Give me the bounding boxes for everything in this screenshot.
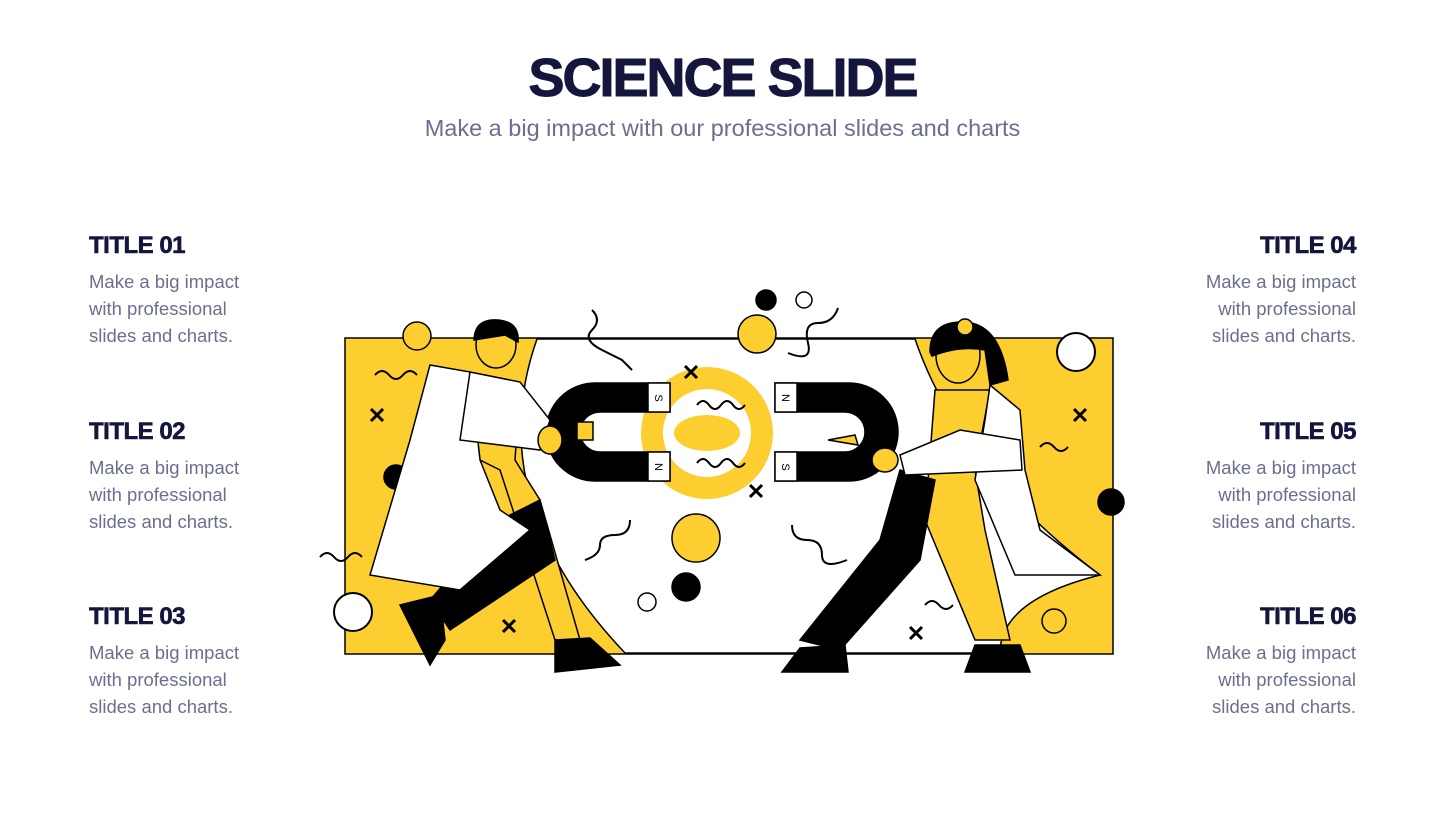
subtitle: Make a big impact with our professional slides and charts <box>425 115 1020 141</box>
text block: title 04 <box>1206 232 1357 346</box>
text block: title 06 <box>1206 603 1356 717</box>
text block: title 03: Make a big impact with professional slides and charts. <box>89 642 239 717</box>
text block: title 05 <box>1206 418 1356 532</box>
text block: title 02 <box>88 418 239 532</box>
text block: title 06: Make a big impact with professional slides and charts. <box>1206 642 1356 717</box>
left magnet: N <box>652 463 664 471</box>
text block: title 01: TITLE 01 <box>89 232 185 259</box>
text block: title 05: Make a big impact with professional slides and charts. <box>1206 457 1356 532</box>
right magnet <box>775 383 898 481</box>
title: SCIENCE SLIDE <box>528 48 917 108</box>
text block: title 05: TITLE 05 <box>1260 418 1356 445</box>
text block: title 01: Make a big impact with professional slides and charts. <box>89 271 239 346</box>
text block: title 02: TITLE 02 <box>89 418 185 445</box>
background panel <box>345 338 1113 654</box>
text block: title 03 <box>88 603 239 717</box>
magnet ring <box>641 367 773 499</box>
text block: title 06: TITLE 06 <box>1260 603 1356 630</box>
right magnet: S <box>779 463 791 471</box>
squiggles and crosses <box>320 308 1086 639</box>
text block: title 03: TITLE 03 <box>89 603 185 630</box>
decorative circles <box>334 290 1124 633</box>
left magnet <box>546 383 670 481</box>
man scientist <box>370 320 620 672</box>
text block: title 02: Make a big impact with professional slides and charts. <box>89 457 239 532</box>
left magnet: S <box>652 394 664 402</box>
text block: title 04: TITLE 04 <box>1260 232 1356 259</box>
text block: title 01 <box>88 232 239 346</box>
woman scientist <box>782 319 1100 672</box>
text block: title 04: Make a big impact with professional slides and charts. <box>1206 271 1356 346</box>
right magnet: N <box>779 394 791 402</box>
